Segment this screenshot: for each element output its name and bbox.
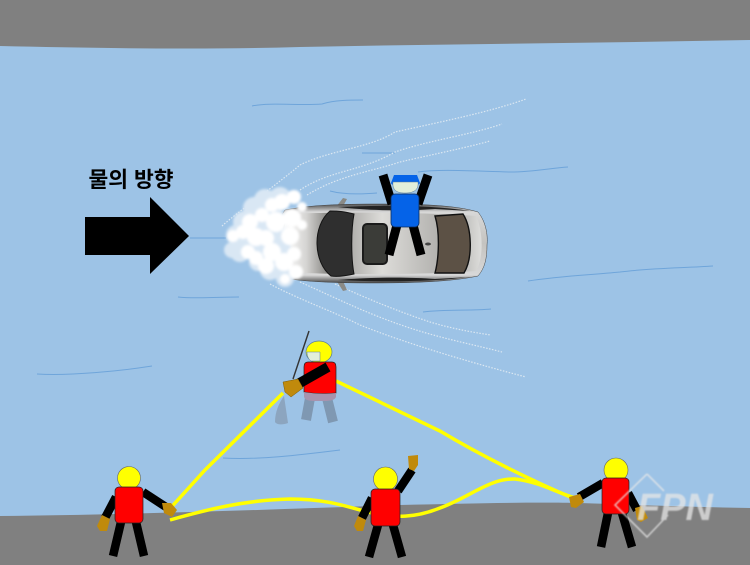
glove left [97, 515, 110, 531]
rope: floating line [170, 479, 575, 520]
car sunroof [363, 224, 387, 264]
swimmer face [307, 352, 320, 361]
swimmer arm [298, 367, 328, 384]
head [374, 467, 398, 491]
car centre sheen [282, 213, 482, 274]
car rear window [435, 214, 470, 273]
swimmer life vest [304, 362, 336, 394]
submerged legs [306, 398, 333, 422]
car windshield [317, 211, 354, 276]
direction label: 물의 방향 [88, 168, 174, 192]
rescuer left on bank [97, 466, 177, 556]
bottom road bank [0, 503, 750, 565]
glove right [162, 503, 177, 517]
car mirrors [336, 198, 347, 291]
dotted wake lines [222, 99, 526, 377]
rescuer right on bank [569, 458, 648, 547]
water ripples [37, 100, 713, 458]
swimmer head [306, 341, 332, 363]
paddle shaft [293, 331, 309, 379]
life vest [602, 478, 629, 514]
vest under water [304, 392, 336, 401]
limbs [579, 483, 637, 547]
driver on car roof [383, 175, 428, 255]
rescuer middle on bank [354, 455, 418, 557]
driver helmet [391, 175, 420, 187]
driver arms and legs [383, 175, 428, 255]
car antenna [425, 242, 431, 246]
life vest [371, 489, 400, 526]
watermark: FPN logo [615, 474, 715, 537]
head [118, 466, 140, 490]
glove lower [354, 516, 366, 531]
limbs [105, 492, 166, 556]
car [276, 198, 487, 291]
limbs [362, 470, 412, 557]
car body [276, 204, 487, 283]
life vest [115, 487, 143, 523]
water spray on car bonnet [224, 187, 307, 287]
head [604, 458, 628, 482]
swimmer glove [283, 379, 303, 397]
logo text: FPN [637, 487, 715, 529]
glove right [635, 506, 648, 522]
rope: to swimmer right [336, 381, 575, 499]
glove left [569, 494, 584, 508]
rescuer swimmer with paddle [275, 331, 336, 424]
rope: to swimmer left [166, 393, 283, 513]
glove raised [408, 455, 418, 471]
driver torso [391, 194, 419, 227]
arrow: water direction [85, 197, 189, 274]
driver face [393, 182, 418, 193]
logo diamond [615, 474, 668, 537]
submerged paddle blade [275, 396, 288, 424]
car side windows [338, 206, 470, 281]
top road bank [0, 0, 750, 49]
